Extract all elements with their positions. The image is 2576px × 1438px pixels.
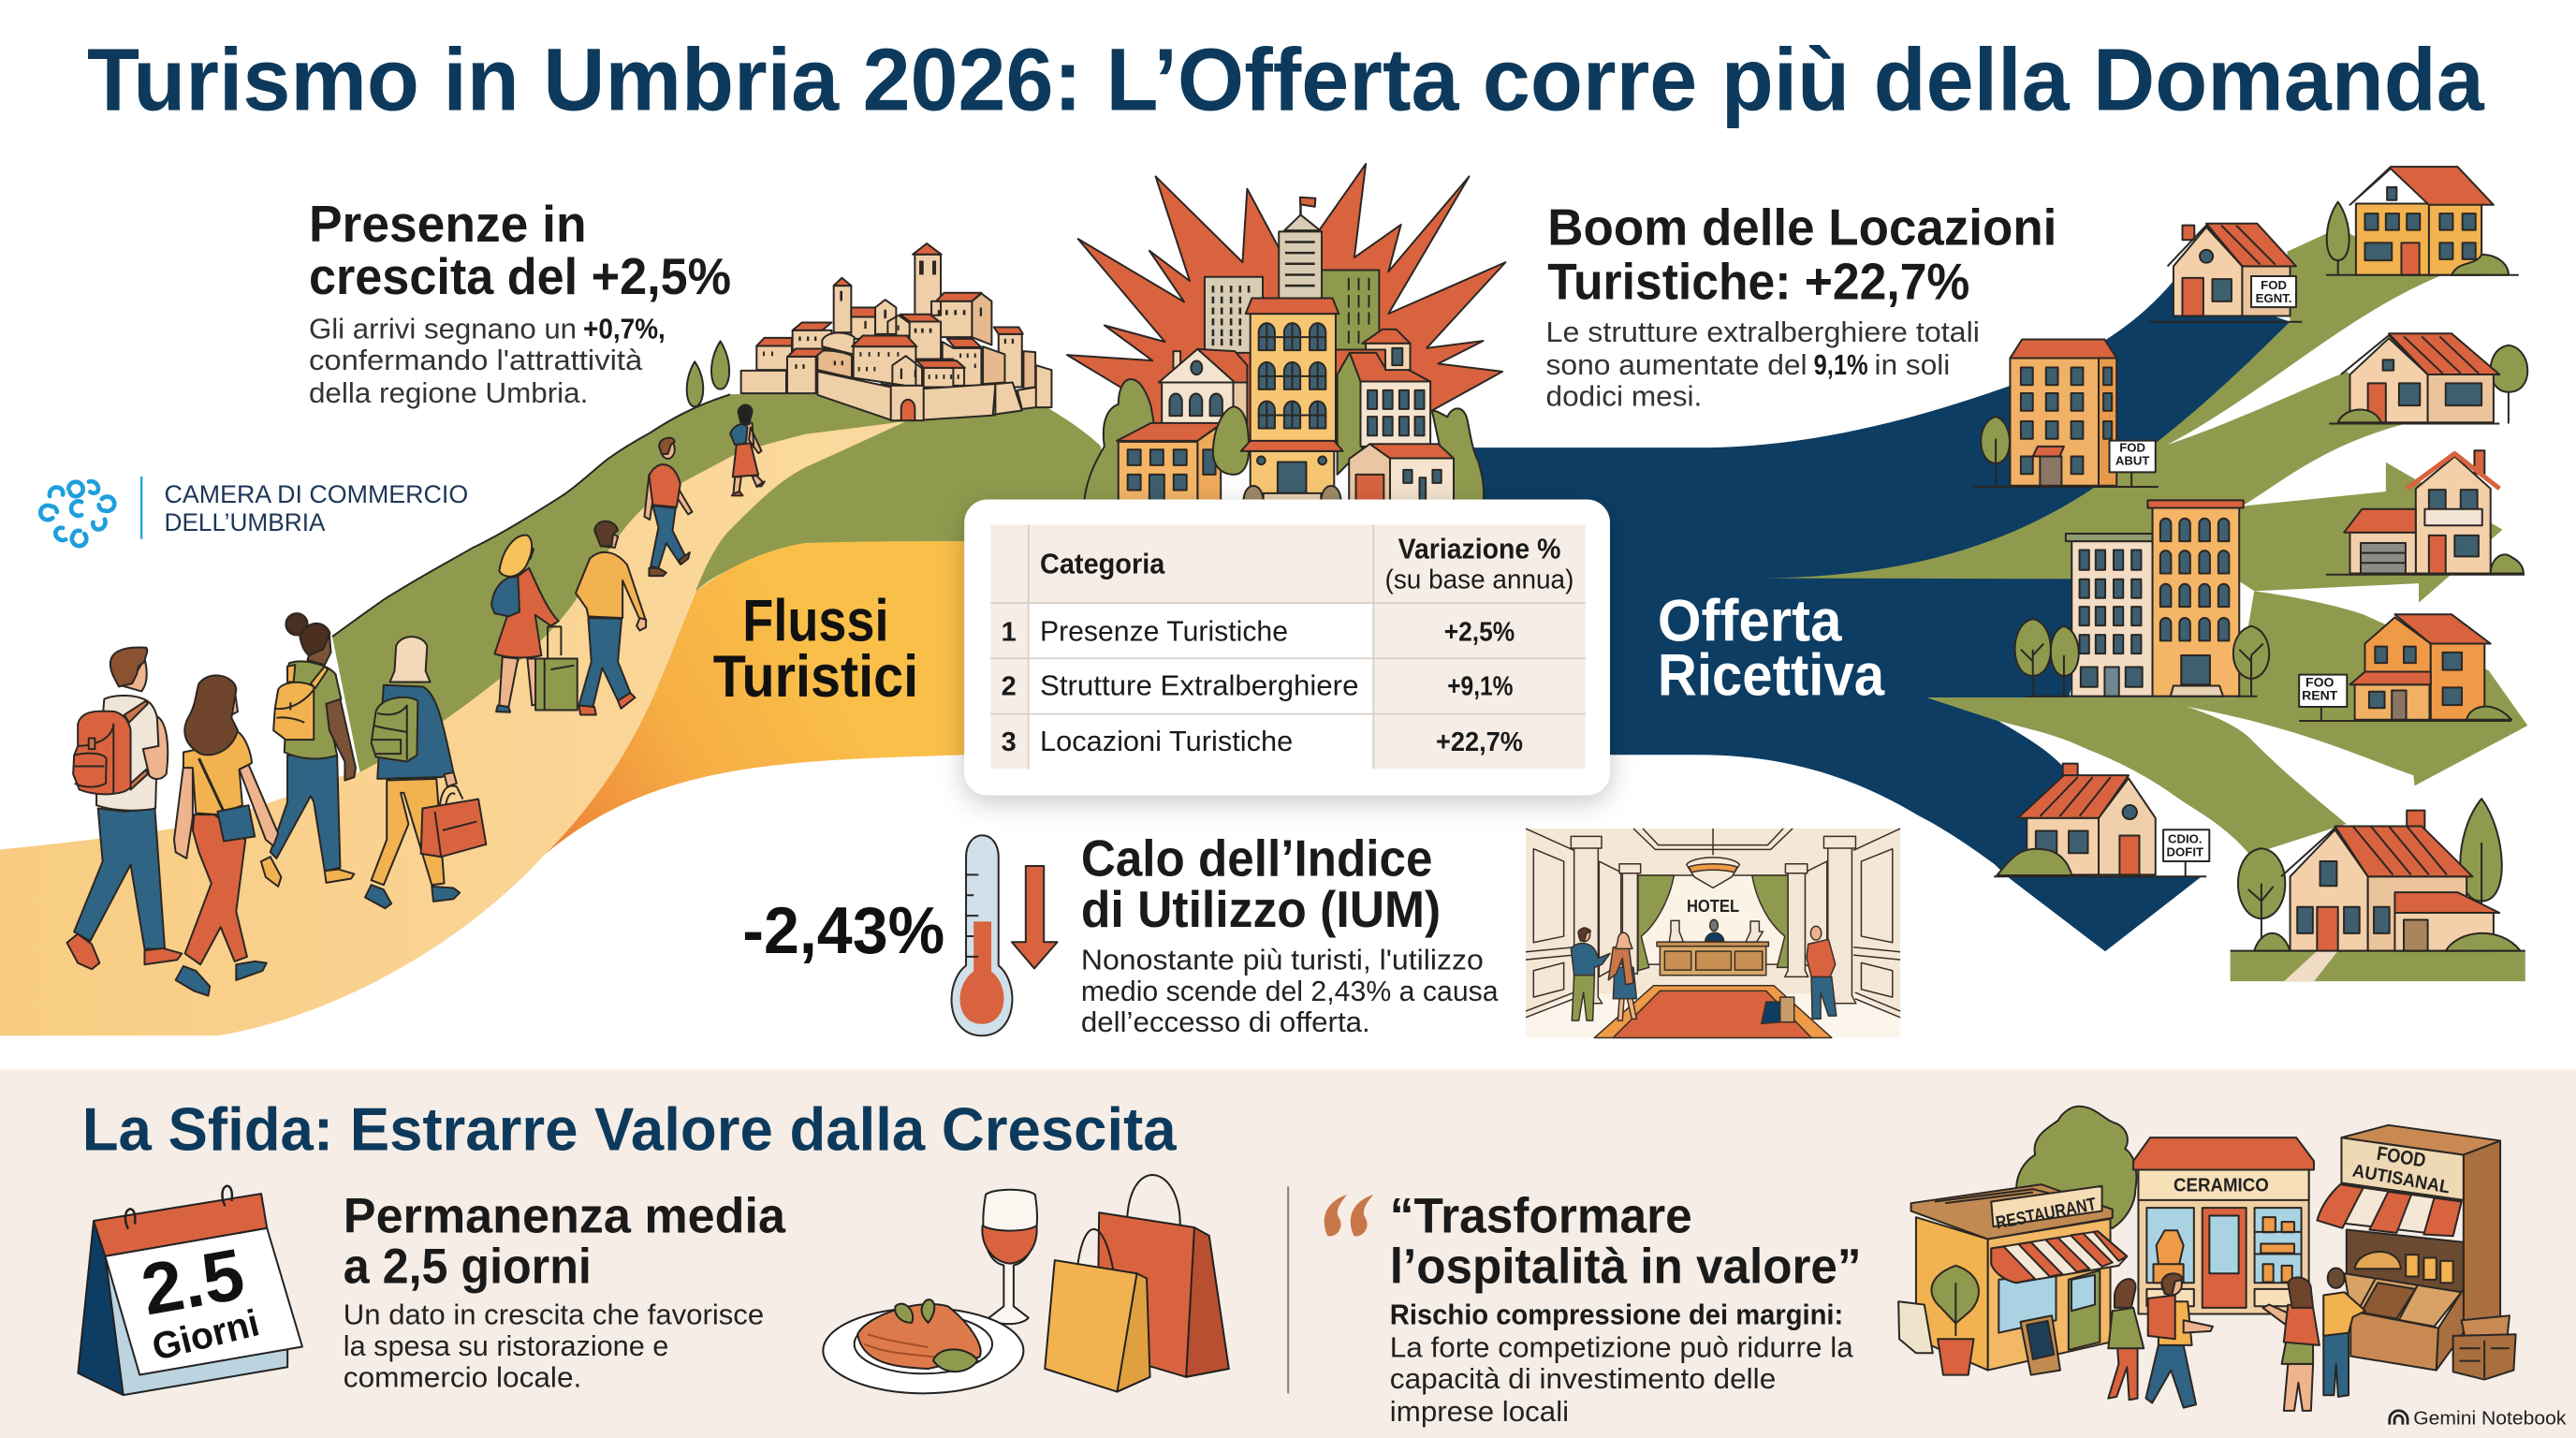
luggage [1762, 997, 1794, 1023]
house: small on navy flow [1994, 764, 2209, 876]
text block: permanenza media: a 2,5 giorni [344, 1240, 592, 1295]
food shop sign text [2350, 1143, 2452, 1198]
table row 2: Strutture Extralberghiere [1040, 668, 1358, 701]
table header: Variazione % [1398, 533, 1560, 565]
central hotel [1241, 298, 1343, 503]
lobby walls [1526, 829, 1900, 1037]
wine glass [982, 1190, 1037, 1324]
green arrow lower [1927, 697, 2347, 855]
table row 1: 1 [1002, 617, 1017, 647]
icon: cypress trees [687, 341, 729, 406]
quote text block: l’ospitalità in valore” [1390, 1240, 1862, 1295]
text block: boom locazioni: Le strutture extralberghiere totali [1546, 315, 1980, 348]
left gabled house [1159, 349, 1247, 425]
text block: boom locazioni: dodici mesi. [1546, 380, 1702, 413]
flow label: Flussi Turistici [713, 588, 918, 710]
quote text block: “Trasformare [1390, 1188, 1692, 1243]
tourist flow bands: hill, path and yellow flow [0, 341, 1130, 1035]
house: second row [2329, 333, 2527, 424]
sign label texts on houses: CDIO. [2168, 831, 2203, 845]
table row 1: +2,5% [1444, 617, 1515, 647]
orange and yellow flow band [545, 541, 1050, 855]
calendar number: 2.5 [136, 1234, 250, 1331]
ceramic sign text: CERAMICO [2174, 1175, 2269, 1196]
quote text block [1390, 1188, 1862, 1428]
shop planter [1898, 1266, 1979, 1375]
floor [1526, 994, 1900, 1037]
town back buildings [756, 243, 1035, 389]
house: apartment block with sign [1973, 340, 2159, 487]
house: large bottom right [2231, 799, 2525, 981]
text block: calo IUM: dell’eccesso di offerta. [1081, 1005, 1370, 1038]
logo text: CAMERA DI COMMERCIO [165, 479, 468, 508]
chandelier [1687, 858, 1739, 888]
section divider [1287, 1186, 1289, 1393]
food shop sign text: AUTISANAL [2350, 1162, 2452, 1198]
text block: boom locazioni: Turistiche: +22,7% [1547, 253, 1969, 310]
table row 3: +22,7% [1436, 727, 1523, 757]
text block: permanenza media: Permanenza media [344, 1188, 786, 1243]
table grid lines [990, 525, 1586, 769]
big number: -2,43%: -2,43% [742, 893, 944, 967]
reception desk [1657, 942, 1768, 946]
calendar back [105, 1255, 287, 1395]
flow label: Offerta Ricettiva: Ricettiva [1658, 642, 1885, 708]
artisan food shop [2318, 1125, 2500, 1371]
table row 2 [1002, 668, 1513, 701]
house: with garage and balcony [2326, 450, 2525, 575]
flow label: Offerta Ricettiva [1658, 588, 1885, 708]
table row 1 [1002, 614, 1515, 647]
orange starburst [1067, 164, 1505, 447]
table row 2: 2 [1002, 671, 1017, 701]
tree clumps [1084, 379, 1154, 503]
table tinted cells [990, 525, 1586, 769]
illustration: local shops and shoppers [1898, 1107, 2516, 1411]
green arrows upper [1766, 228, 2502, 603]
text block: permanenza media [344, 1188, 786, 1393]
calendar page [105, 1228, 302, 1374]
town walls and gate [741, 365, 1051, 420]
text block: presenze: Presenze in [309, 196, 587, 253]
text block: boom locazioni: 9,1% [1814, 348, 1868, 381]
quote mark [1325, 1195, 1373, 1237]
sign label texts on houses: FOO [2305, 675, 2334, 690]
credit: Gemini Notebook: Gemini Notebook [2413, 1409, 2567, 1430]
credit icon [2390, 1411, 2408, 1425]
illustration: plate, wine glass and shopping bags [823, 1175, 1229, 1393]
sign label texts on houses [2115, 278, 2338, 858]
text block: boom locazioni [1546, 199, 2056, 413]
quote text block: imprese locali [1390, 1395, 1569, 1428]
small tree by hotel [1213, 406, 1249, 475]
hill outline [332, 394, 730, 637]
guest couple [1571, 928, 1636, 1020]
walker 3: green shirt and yellow backpack [261, 613, 356, 887]
flow label: Flussi Turistici: Flussi [742, 588, 889, 653]
town front buildings [787, 332, 1004, 393]
herb leaves [895, 1299, 977, 1372]
text block: presenze: Gli arrivi segnano un [309, 313, 577, 345]
sign label texts on houses: FOD [2119, 441, 2145, 455]
lower right house [1349, 444, 1454, 503]
table header: Categoria [1040, 548, 1165, 580]
green hill [332, 393, 1130, 775]
hill town [741, 243, 1051, 420]
food shop sign text: FOOD [2375, 1143, 2427, 1172]
cream path [0, 421, 906, 1035]
text block: calo IUM: medio scende del 2,43% a causa [1081, 975, 1500, 1007]
house: paired towers [2015, 500, 2269, 697]
navy flow [1458, 281, 2291, 951]
crates [2453, 1315, 2516, 1380]
central cityscape with orange burst [1067, 164, 1505, 503]
yellow shopping bag [1045, 1229, 1150, 1392]
walker 6: man in yellow sweater [576, 521, 646, 714]
lobby hotel sign text: HOTEL [1687, 896, 1739, 916]
text block: calo IUM: Calo dell’Indice [1081, 829, 1432, 887]
restaurant shop [1911, 1184, 2127, 1371]
back towers [1205, 198, 1379, 353]
lasagna [857, 1304, 981, 1369]
columns [1574, 847, 1856, 1004]
panel: data table [964, 500, 1610, 795]
table row 3: 3 [1002, 727, 1017, 757]
logo: Camera di Commercio dell'Umbria [40, 477, 468, 546]
table row 3: Locazioni Turistiche [1040, 725, 1293, 757]
right tall house [1350, 330, 1430, 447]
flow label: Flussi Turistici: Turistici [713, 644, 918, 710]
town windows [763, 260, 1014, 379]
hotel lobby illustration [1526, 829, 1900, 1037]
wall panels and mouldings [1526, 829, 1900, 1018]
text block: presenze: crescita del +2,5% [309, 248, 731, 305]
table header [1040, 533, 1573, 594]
text block: permanenza media: commercio locale. [344, 1360, 581, 1393]
red shopping bag [1097, 1175, 1229, 1377]
text block: permanenza media: Un dato in crescita che favorisce [344, 1299, 764, 1331]
house: for rent [2299, 614, 2511, 721]
text block: presenze: +0,7%, [583, 313, 666, 345]
sign label texts on houses: RENT [2302, 688, 2338, 703]
table header: (su base annua) [1385, 565, 1573, 594]
ceiling coffer [1633, 829, 1793, 849]
ground under bottom house [2231, 951, 2525, 981]
sign label texts on houses: FOD [2261, 278, 2287, 292]
chalkboard [2021, 1315, 2060, 1375]
section heading: la sfida: La Sfida: Estrarre Valore dalla Crescita [82, 1095, 1178, 1164]
accommodation supply flow with houses [1458, 167, 2527, 981]
green arrow middle [2188, 591, 2527, 785]
text block: presenze [309, 196, 731, 409]
text block: presenze: confermando l'attrattività [309, 344, 643, 376]
lasagna layers [864, 1334, 936, 1357]
walkers further up the path [491, 405, 765, 714]
text block: permanenza media: la spesa su ristorazione e [344, 1329, 668, 1362]
table row 1: Presenze Turistiche [1040, 614, 1288, 647]
shoppers [2108, 1269, 2365, 1411]
logo text line 2: DELL’UMBRIA [165, 507, 326, 536]
calendar label: Giorni [148, 1300, 263, 1369]
back wall [1638, 875, 1788, 964]
table row 2: +9,1% [1447, 671, 1513, 701]
icon: logo swirl [40, 481, 114, 546]
restaurant sign text: RESTAURANT [1994, 1195, 2098, 1234]
text block: calo IUM: di Utilizzo (IUM) [1081, 881, 1441, 938]
text block: calo IUM [1081, 829, 1500, 1038]
text block: calo IUM: Nonostante più turisti, l'utilizzo [1081, 944, 1484, 976]
tree behind shops [2016, 1107, 2136, 1228]
lower left yellow building [1117, 423, 1222, 503]
walker 2: orange trousers [174, 675, 278, 996]
plate [823, 1308, 1023, 1393]
calendar left side [78, 1221, 124, 1395]
quote text block: capacità di investimento delle [1390, 1362, 1776, 1395]
text block: boom locazioni: Boom delle Locazioni [1547, 199, 2056, 257]
house: top centre with sign [2149, 224, 2302, 322]
calendar rings [125, 1186, 232, 1229]
sign label texts on houses: ABUT [2115, 454, 2149, 468]
walker 1: red backpack [67, 648, 182, 969]
text block: presenze: della regione Umbria. [309, 376, 588, 409]
flow label: Offerta Ricettiva: Offerta [1658, 588, 1842, 653]
sign label texts on houses: EGNT. [2256, 291, 2291, 305]
male guest at right [1807, 926, 1837, 1019]
title: Turismo in Umbria 2026: L’Offerta corre più della Domanda [87, 31, 2485, 130]
walker 8: woman at top of path [730, 405, 765, 495]
icon: thermometer and down arrow [952, 835, 1057, 1035]
text block: boom locazioni: in soli [1875, 348, 1950, 381]
curtains [1638, 875, 1674, 971]
calendar red band [94, 1194, 267, 1256]
bottom band background [0, 1070, 2576, 1438]
table row 3 [1002, 725, 1523, 757]
sign label texts on houses: DOFIT [2167, 844, 2203, 858]
house: top right yellow [2326, 167, 2519, 275]
quote text block: La forte competizione può ridurre la [1390, 1331, 1854, 1364]
walkers in the foreground [67, 613, 486, 996]
walker 4: blonde hair with red bag [365, 637, 486, 908]
desk items [1669, 920, 1763, 942]
ceramic shop [2133, 1137, 2314, 1314]
receptionist [1705, 932, 1724, 941]
text block: boom locazioni: sono aumentate del [1546, 348, 1808, 381]
table card [964, 500, 1610, 795]
quote text block: Rischio compressione dei margini: [1390, 1299, 1843, 1331]
icon: calendar 2.5 giorni [78, 1186, 302, 1395]
walker 7: orange shirt [644, 438, 692, 576]
red carpet [1594, 986, 1832, 1037]
logo divider [140, 477, 142, 539]
walker 5: woman with green suitcase [491, 536, 578, 712]
